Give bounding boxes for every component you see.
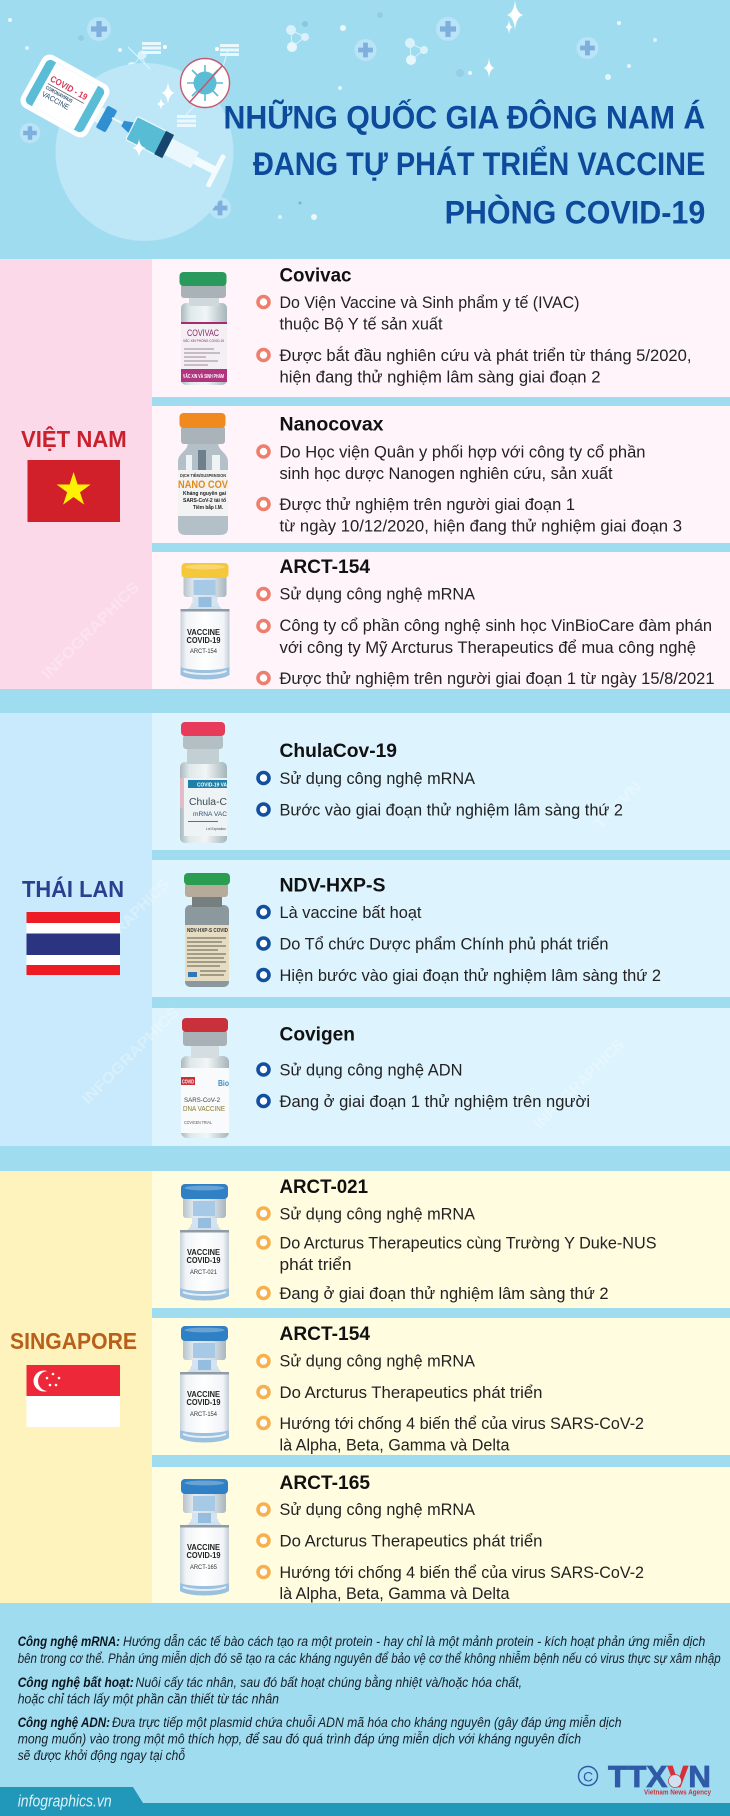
icon: vaccine bottle: VACCINE bbox=[40, 89, 71, 112]
vaccine: ChulaCov-19: ChulaCov-19 bbox=[280, 741, 397, 762]
vaccine: ARCT-154 (Việt Nam) bbox=[258, 557, 714, 688]
vial: ARCT-021: VACCINE bbox=[187, 1248, 221, 1257]
vial: ARCT-154: COVID-19 bbox=[186, 1398, 221, 1407]
vial: ARCT-154 yellow cap bbox=[180, 563, 230, 680]
vial: Nanocovax: SARS-CoV-2 tái tổ bbox=[183, 497, 227, 504]
vial: ChulaCov-19 bbox=[180, 722, 227, 843]
panel: Thái Lan: INFOGRAPHICS bbox=[76, 876, 173, 973]
bullet: Do Arcturus Therapeutics phát triển bbox=[280, 1383, 542, 1402]
vial: ChulaCov-19: COVID-19 VA bbox=[197, 782, 227, 788]
panel: Singapore bbox=[0, 1171, 730, 1603]
icon: vaccine bottle bbox=[17, 51, 126, 148]
vial: ARCT-021: COVID-19 bbox=[186, 1256, 221, 1265]
vaccine: Nanocovax bbox=[258, 414, 682, 536]
vial: Covivac: VẮC XIN VÀ SINH PHẨM bbox=[183, 372, 224, 380]
plus icons bbox=[20, 17, 599, 219]
title: NHỮNG QUỐC GIA ĐÔNG NAM Á bbox=[224, 98, 705, 136]
bullet: hiện đang thử nghiệm lâm sàng giai đoạn 2 bbox=[280, 368, 600, 386]
note: DNA: Công nghệ ADN: bbox=[18, 1715, 110, 1730]
notes: technology definitions bbox=[18, 1634, 721, 1763]
circle backdrop bbox=[56, 63, 234, 241]
vaccine: Covigen bbox=[258, 1024, 590, 1111]
bullet: Do Arcturus Therapeutics phát triển bbox=[280, 1532, 542, 1550]
vaccine: ARCT-165 bbox=[258, 1473, 644, 1603]
bullet: Được thử nghiệm trên người giai đoạn 1 từ ngày 15/8/2021 bbox=[280, 669, 714, 688]
bullet: Do Arcturus Therapeutics cùng Trường Y Duke-NUS bbox=[280, 1234, 656, 1252]
bullet: Sử dụng công nghệ mRNA bbox=[280, 769, 476, 788]
bullet bbox=[258, 442, 646, 483]
bullet: Do Viện Vaccine và Sinh phẩm y tế (IVAC) bbox=[280, 293, 580, 312]
vaccine: NDV-HXP-S bbox=[258, 876, 661, 985]
vial: ARCT-165 bbox=[180, 1479, 229, 1596]
vial: Covigen bbox=[181, 1018, 229, 1138]
title: PHÒNG COVID-19 bbox=[445, 193, 705, 230]
bullet: Đang ở giai đoạn 1 thử nghiệm trên người bbox=[280, 1092, 590, 1111]
bullet bbox=[258, 495, 682, 536]
bullet: Công ty cổ phần công nghệ sinh học VinBioCare đàm phán bbox=[280, 616, 712, 635]
vaccine: Covivac: Covivac bbox=[280, 266, 352, 286]
bullet: thuộc Bộ Y tế sản xuất bbox=[280, 314, 443, 334]
vaccine: ARCT-154 (Singapore) bbox=[258, 1324, 644, 1454]
vial: ARCT-154: ARCT-154 bbox=[190, 1411, 217, 1418]
bullet bbox=[258, 346, 692, 386]
bullet: Được bắt đầu nghiên cứu và phát triển từ tháng 5/2020, bbox=[280, 346, 692, 365]
panel: Thái Lan: TTXVN bbox=[591, 778, 645, 833]
icon: crossed out virus bbox=[180, 58, 230, 108]
note: inactivated: hoặc chỉ tách lấy một phần cần thiết từ tác nhân bbox=[18, 1692, 279, 1706]
bullet: với công ty Mỹ Arcturus Therapeutics để mua công nghệ bbox=[280, 638, 696, 657]
bullet bbox=[258, 1563, 644, 1603]
vial: NDV-HXP-S: NDV-HXP-S COVID bbox=[187, 928, 228, 934]
bullet: Hướng tới chống 4 biến thể của virus SARS-CoV-2 bbox=[280, 1563, 644, 1582]
vial: ARCT-021: ARCT-021 bbox=[190, 1269, 217, 1276]
vial: ChulaCov-19: Lot Expiration bbox=[206, 826, 226, 831]
bullet: Hướng tới chống 4 biến thể của virus SARS-CoV-2 bbox=[280, 1414, 644, 1433]
bullet: Sử dụng công nghệ mRNA bbox=[280, 1352, 476, 1370]
bullet: Đang ở giai đoạn thử nghiệm lâm sàng thứ 2 bbox=[280, 1284, 608, 1303]
footer bar: infographics.vn: infographics.vn bbox=[18, 1792, 112, 1810]
note: DNA: Đưa trực tiếp một plasmid chứa chuỗi ADN mã hóa cho kháng nguyên (gây đáp ứng miễn dịch bbox=[112, 1715, 622, 1730]
note: DNA bbox=[18, 1715, 621, 1763]
bullet: là Alpha, Beta, Gamma và Delta bbox=[280, 1584, 510, 1603]
country heading: Thái Lan: THÁI LAN bbox=[22, 875, 124, 902]
bullet bbox=[258, 293, 580, 334]
vial: Covigen: COVID bbox=[182, 1080, 194, 1086]
bullet: là Alpha, Beta, Gamma và Delta bbox=[280, 1436, 510, 1454]
panel: Việt Nam bbox=[0, 259, 730, 689]
molecules bbox=[108, 25, 428, 196]
vaccine: ARCT-021 bbox=[258, 1177, 656, 1303]
vial: ARCT-165: ARCT-165 bbox=[190, 1564, 217, 1571]
note: inactivated: Nuôi cấy tác nhân, sau đó bất hoạt chúng bằng nhiệt và/hoặc hóa chất, bbox=[136, 1675, 522, 1690]
panel: Việt Nam: INFOGRAPHICS bbox=[39, 579, 143, 683]
footer bar: infographics.vn bbox=[0, 1787, 730, 1816]
header banner bbox=[8, 0, 705, 241]
bullet: Bước vào giai đoạn thử nghiệm lâm sàng thứ 2 bbox=[280, 800, 623, 820]
vial: ARCT-154 yellow cap: ARCT-154 bbox=[190, 648, 217, 655]
country heading: Việt Nam: VIỆT NAM bbox=[21, 425, 127, 452]
bullet: Hiện bước vào giai đoạn thử nghiệm lâm sàng thứ 2 bbox=[280, 966, 661, 985]
vial: Covigen: COVIGEN TRIAL bbox=[184, 1120, 212, 1125]
vial: Nanocovax: DỊCH TIÊM/SUSPENSION bbox=[180, 471, 226, 478]
bullet: Được thử nghiệm trên người giai đoạn 1 bbox=[280, 495, 575, 514]
vial: ARCT-165: COVID-19 bbox=[186, 1551, 221, 1560]
vial: ARCT-154 yellow cap: COVID-19 bbox=[186, 636, 221, 645]
note: inactivated bbox=[18, 1675, 522, 1706]
note: DNA: sẽ được khởi động ngay tại chỗ bbox=[18, 1748, 185, 1763]
text list icons bbox=[128, 42, 239, 127]
bullet: Do Học viện Quân y phối hợp với công ty cổ phần bbox=[280, 442, 646, 462]
vial: ARCT-154 yellow cap: VACCINE bbox=[187, 628, 221, 637]
vial: Nanocovax bbox=[178, 413, 229, 535]
vial: Covivac: VẮC XIN PHÒNG COVID-19 bbox=[183, 338, 225, 343]
vial: ARCT-165: VACCINE bbox=[187, 1543, 221, 1552]
bullet: từ ngày 10/12/2020, hiện đang thử nghiệm giai đoạn 3 bbox=[280, 516, 682, 536]
vaccine: ARCT-165: ARCT-165 bbox=[280, 1473, 370, 1494]
icon: vaccine bottle: CORONAVIRUS bbox=[44, 85, 74, 105]
logo: TTXVN: C bbox=[583, 1768, 593, 1784]
vaccine: ARCT-021: ARCT-021 bbox=[280, 1177, 368, 1198]
country heading: Singapore: SINGAPORE bbox=[10, 1328, 137, 1354]
vaccine: Nanocovax: Nanocovax bbox=[280, 414, 384, 436]
panel: Thái Lan: INFOGRAPHICS bbox=[79, 1004, 183, 1108]
flag: Singapore bbox=[26, 1365, 120, 1427]
sparkles bbox=[483, 0, 523, 78]
note: mRNA bbox=[18, 1634, 721, 1666]
panel: Thái Lan bbox=[0, 713, 730, 1146]
vaccine: ARCT-154 (Việt Nam): ARCT-154 bbox=[280, 557, 370, 578]
vial: Covigen: SARS-CoV-2 bbox=[184, 1097, 220, 1104]
note: mRNA: Công nghệ mRNA: bbox=[18, 1634, 120, 1649]
vaccine: Covigen: Covigen bbox=[280, 1024, 355, 1046]
vial: Nanocovax: NANO COV bbox=[178, 479, 229, 491]
vial: ChulaCov-19: mRNA VAC bbox=[193, 811, 227, 818]
bullet bbox=[258, 1414, 644, 1454]
bullet: Sử dụng công nghệ mRNA bbox=[280, 1500, 476, 1519]
sparkles inside backdrop bbox=[157, 82, 175, 110]
vial: Covigen: Bio bbox=[218, 1079, 229, 1088]
flag: Thái Lan bbox=[26, 912, 120, 975]
bullet: Là vaccine bất hoạt bbox=[280, 903, 422, 922]
bullet: Sử dụng công nghệ mRNA bbox=[280, 584, 476, 604]
note: inactivated: Công nghệ bất hoạt: bbox=[18, 1675, 134, 1690]
flag: Việt Nam bbox=[28, 460, 120, 522]
vial: Covivac bbox=[180, 272, 227, 385]
note: DNA: mong muốn) vào trong một mô thích hợp, để sau đó quá trình đáp ứng miễn dịch với kháng nguyên đích bbox=[18, 1732, 581, 1746]
title bbox=[224, 98, 705, 230]
vial: ChulaCov-19: Chula-C bbox=[189, 797, 227, 808]
bullet: Do Tổ chức Dược phẩm Chính phủ phát triển bbox=[280, 934, 608, 954]
icon: vaccine bottle: COVID - 19 bbox=[49, 74, 89, 102]
logo: TTXVN: Vietnam News Agency bbox=[644, 1790, 711, 1796]
bullet bbox=[258, 1234, 656, 1274]
vial: Nanocovax: Kháng nguyên gai bbox=[183, 491, 226, 497]
bullet: sinh học dược Nanogen nghiên cứu, sản xuất bbox=[280, 464, 613, 483]
bullet: Sử dụng công nghệ ADN bbox=[280, 1060, 462, 1080]
bullet: phát triển bbox=[280, 1255, 352, 1274]
bullet: Sử dụng công nghệ mRNA bbox=[280, 1204, 476, 1224]
logo: TTXVN: TTXVN bbox=[608, 1759, 711, 1794]
vial: ARCT-021 bbox=[180, 1184, 229, 1300]
icon: syringe bbox=[104, 102, 226, 188]
vial: Covivac: COVIVAC bbox=[187, 328, 219, 338]
vaccine: Covivac bbox=[258, 266, 692, 386]
vaccine: ARCT-154 (Singapore): ARCT-154 bbox=[280, 1324, 370, 1345]
vial: ARCT-154 bbox=[180, 1326, 229, 1442]
vaccine: NDV-HXP-S: NDV-HXP-S bbox=[280, 876, 386, 896]
panel: Thái Lan: INFOGRAPHICS bbox=[531, 1036, 628, 1133]
vaccine: ChulaCov-19 bbox=[258, 741, 623, 820]
vial: NDV-HXP-S bbox=[184, 873, 230, 987]
vial: ARCT-154: VACCINE bbox=[187, 1390, 221, 1399]
vial: Covigen: DNA VACCINE bbox=[183, 1106, 225, 1113]
bullet bbox=[258, 616, 712, 657]
vial: Nanocovax: Tiêm bắp I.M. bbox=[193, 504, 224, 511]
